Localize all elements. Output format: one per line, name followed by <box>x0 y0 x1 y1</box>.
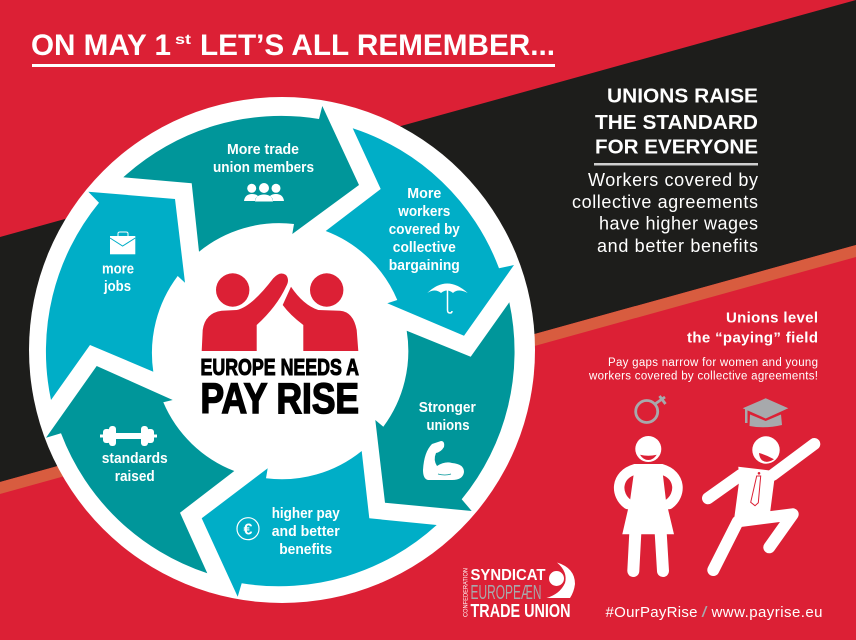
logo mark <box>546 562 575 598</box>
icon: umbrella <box>427 284 468 313</box>
left figure <box>202 273 288 351</box>
centre logo: Europe needs a pay rise <box>200 273 359 423</box>
footer: hashtag and website: www.payrise.eu <box>710 604 822 621</box>
text: workers covered: collective agreements <box>572 192 758 212</box>
arrow: more workers covered by collective bargaining: covered by <box>389 222 460 238</box>
arrow: more trade union members: More trade <box>227 142 299 158</box>
logo: European Trade Union Confederation <box>462 562 575 621</box>
logo: European Trade Union Confederation: EUROPEÆN <box>470 582 542 604</box>
black diagonal band <box>0 0 856 482</box>
arrow: standards raised <box>46 366 234 573</box>
arrow: more jobs <box>46 192 185 400</box>
arrow: standards raised: standards <box>102 451 168 467</box>
text: pay gaps <box>588 357 818 382</box>
arrow: stronger unions: unions <box>426 418 470 434</box>
logo text <box>200 354 359 423</box>
heading: unions raise the standard: THE STANDARD <box>595 111 758 134</box>
text: workers covered: and better benefits <box>597 236 758 256</box>
arrow: stronger unions: Stronger <box>419 400 476 416</box>
title: st <box>175 31 191 47</box>
icon: dumbbell <box>100 426 157 446</box>
icon: euro coin: € <box>244 522 253 538</box>
arrow: more trade union members <box>123 106 359 252</box>
logo: European Trade Union Confederation: SYNDICAT <box>470 567 546 584</box>
arrow: higher pay and better benefits <box>202 451 437 597</box>
arrow: more workers covered by collective bargaining: collective <box>393 240 456 256</box>
right figure <box>283 273 358 351</box>
icon: female symbol <box>636 396 666 422</box>
title: ON MAY 1 <box>31 29 171 62</box>
title <box>31 29 555 67</box>
arrow: more trade union members: union members <box>213 160 314 176</box>
arrow: more jobs: more <box>102 262 134 278</box>
heading: unions raise the standard <box>594 84 758 166</box>
logo text: PAY RISE <box>200 375 359 423</box>
heading: unions raise the standard: FOR EVERYONE <box>595 136 758 158</box>
logo: European Trade Union Confederation: CONFEDERATION <box>462 568 470 617</box>
text: pay gaps: Pay gaps narrow for women and young <box>608 357 818 369</box>
arrow: higher pay and better benefits: benefits <box>279 542 332 558</box>
text: pay gaps: workers covered by collective agreements! <box>588 370 818 382</box>
arrow: higher pay and better benefits: and better <box>272 524 340 540</box>
arrow: more workers covered by collective bargaining: More <box>407 186 441 202</box>
heading: unions level the paying field <box>687 310 818 346</box>
text: workers covered <box>572 170 758 256</box>
footer: hashtag and website <box>606 604 822 621</box>
arrow: more workers covered by collective bargaining: workers <box>397 204 450 220</box>
heading: unions raise the standard: UNIONS RAISE <box>607 84 758 108</box>
icon: flexed arm <box>423 441 464 480</box>
heading: unions level the paying field: Unions level <box>726 310 818 326</box>
arrow: higher pay and better benefits: higher pay <box>272 506 340 522</box>
footer: hashtag and website: / <box>702 604 709 621</box>
icon: briefcase <box>110 232 135 254</box>
icon: euro coin <box>237 518 259 540</box>
orange diagonal stripe <box>0 245 856 494</box>
arrow: more workers covered by collective bargaining <box>326 128 514 336</box>
icon: graduation cap <box>743 398 788 427</box>
figure: man <box>708 436 814 570</box>
circular diagram <box>29 97 535 603</box>
text: workers covered: have higher wages <box>599 214 758 234</box>
arrow: more workers covered by collective bargaining: bargaining <box>389 258 460 274</box>
figure: woman <box>619 436 677 571</box>
heading: unions level the paying field: the “paying” field <box>687 330 818 346</box>
arrow: standards raised: raised <box>115 469 155 485</box>
footer: hashtag and website: #OurPayRise <box>606 604 698 621</box>
text: workers covered: Workers covered by <box>588 170 758 190</box>
arrow: more jobs: jobs <box>103 279 131 295</box>
title: LET’S ALL REMEMBER... <box>200 29 555 62</box>
logo text: EUROPE NEEDS A <box>200 354 359 380</box>
arrow: stronger unions <box>375 302 515 511</box>
logo: European Trade Union Confederation: TRADE UNION <box>470 601 570 621</box>
